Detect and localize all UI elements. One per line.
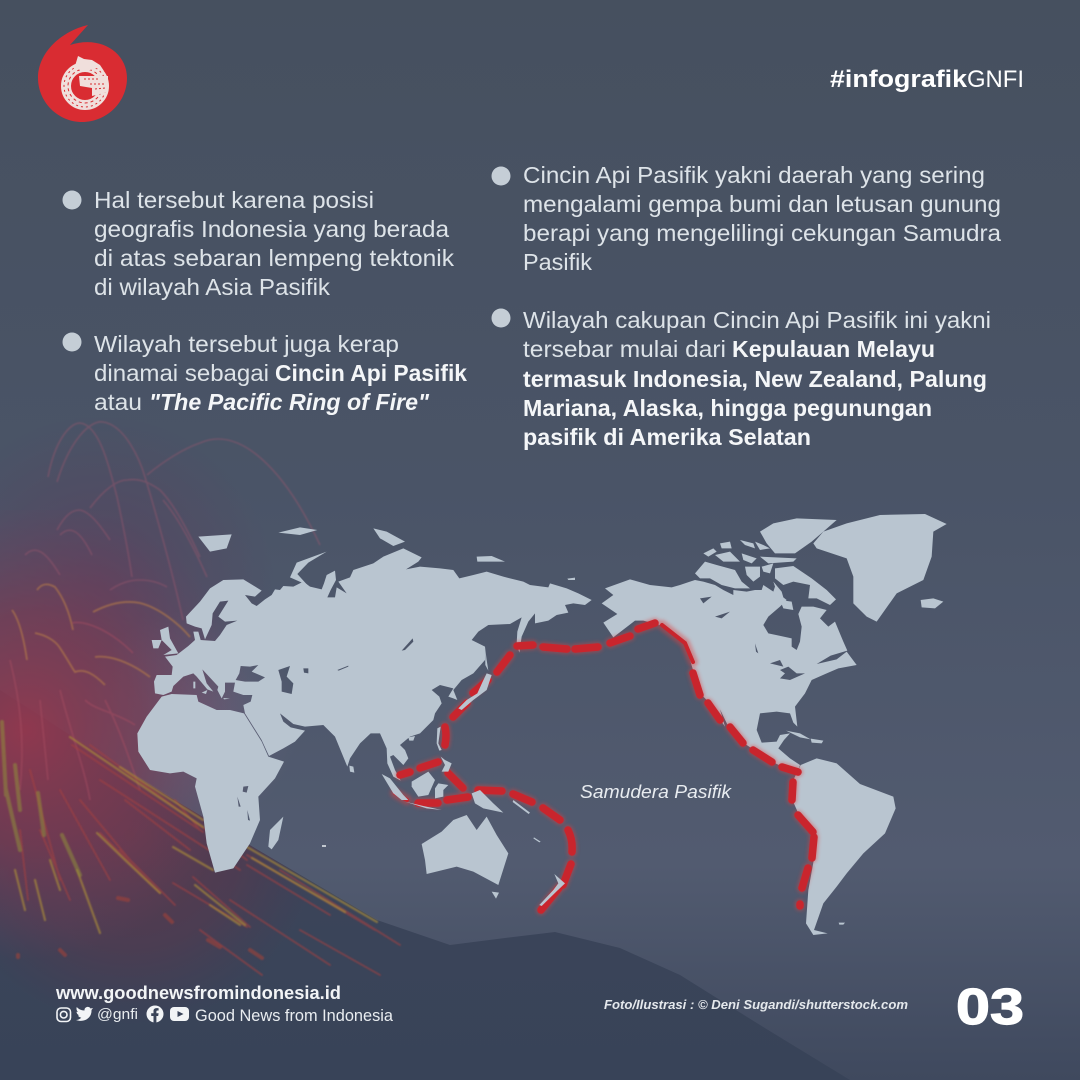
americas xyxy=(602,514,947,935)
tasmania xyxy=(492,892,499,899)
cuba xyxy=(786,731,811,739)
eurasia xyxy=(154,548,592,781)
new siberian islands xyxy=(477,556,505,562)
channel name: Good News from Indonesia xyxy=(195,1006,394,1025)
ring of fire: dashed line xyxy=(395,623,814,910)
ireland xyxy=(152,640,162,648)
hashtag: GNFI xyxy=(967,66,1024,93)
social row xyxy=(57,1006,394,1025)
falklands xyxy=(839,923,845,925)
bullet: definition: mengalami gempa bumi dan letusan gunung xyxy=(523,191,1001,217)
borneo xyxy=(412,772,435,797)
bullet: ring of fire name: dinamai sebagai xyxy=(94,360,269,386)
bullet: coverage xyxy=(492,307,991,450)
bullet: definition xyxy=(492,162,1001,275)
hainan xyxy=(408,736,415,741)
logo xyxy=(38,25,127,122)
wrangel island xyxy=(567,578,575,580)
japan xyxy=(458,673,492,710)
logo red drop xyxy=(38,25,127,122)
lava streaks xyxy=(2,722,400,975)
sakhalin xyxy=(485,647,488,671)
hashtag: #infografik xyxy=(830,66,968,93)
website: www.goodnewsfromindonesia.id xyxy=(55,983,341,1003)
novaya zemlya xyxy=(290,552,327,585)
sulawesi xyxy=(435,783,448,798)
other arctic islands xyxy=(703,540,797,610)
mountain silhouette xyxy=(0,690,850,1080)
volcano eruption photo xyxy=(0,400,850,1080)
bullet: ring of fire name: atau xyxy=(94,389,142,415)
new guinea xyxy=(472,790,503,813)
bullet: ring of fire name: Cincin Api Pasifik xyxy=(275,360,467,386)
icon: youtube xyxy=(170,1007,189,1021)
logo emblem xyxy=(64,56,108,107)
severnaya zemlya xyxy=(373,528,405,546)
orange embers xyxy=(12,584,190,685)
bullet: coverage: Wilayah cakupan Cincin Api Pasifik ini yakni xyxy=(523,307,991,333)
australia xyxy=(422,815,508,885)
mediterranean islands xyxy=(193,682,230,699)
hashtag xyxy=(830,66,1024,93)
bullet: ring of fire name: Wilayah tersebut juga kerap xyxy=(94,331,399,357)
icon: instagram xyxy=(57,1008,70,1022)
south america xyxy=(792,758,896,935)
bullet: geography: di wilayah Asia Pasifik xyxy=(94,274,331,300)
bullet: definition: berapi yang mengelilingi cekungan Samudra xyxy=(523,220,1001,246)
bullet: geography: geografis Indonesia yang berada xyxy=(94,216,449,242)
world map xyxy=(137,514,947,935)
page number: 03 xyxy=(956,978,1024,1035)
photo credit: Foto/Ilustrasi : © Deni Sugandi/shutterstock.com xyxy=(604,997,908,1012)
mindanao and visayas xyxy=(441,757,452,772)
bullet: coverage: termasuk Indonesia, New Zealand, Palung xyxy=(523,366,987,392)
sumatra xyxy=(382,774,408,800)
handle: @gnfi xyxy=(97,1006,138,1023)
ocean label: Samudera Pasifik xyxy=(580,782,732,802)
islands over the ring xyxy=(382,647,565,906)
greenland xyxy=(813,514,947,622)
icon: twitter xyxy=(76,1007,93,1021)
bullet: definition: Cincin Api Pasifik yakni daerah yang sering xyxy=(523,162,985,188)
ejecta arcs xyxy=(25,422,320,620)
bullet: ring of fire name: "The Pacific Ring of Fire" xyxy=(149,389,430,415)
ellesmere island xyxy=(760,518,837,553)
melanesia islands xyxy=(513,800,541,842)
britain xyxy=(160,627,178,655)
bullet: geography xyxy=(62,187,455,300)
bullet: coverage: pasifik di Amerika Selatan xyxy=(523,424,811,450)
bullet: geography: Hal tersebut karena posisi xyxy=(94,187,374,213)
sri lanka xyxy=(349,766,354,773)
north america xyxy=(602,579,857,773)
icon: facebook xyxy=(146,1006,164,1023)
bullet: definition: Pasifik xyxy=(523,249,593,275)
hispaniola xyxy=(811,739,823,743)
bullet: ring of fire name xyxy=(62,331,467,415)
ring of fire: glow xyxy=(395,623,814,910)
java xyxy=(405,802,442,810)
franz josef land xyxy=(278,527,317,535)
new zealand xyxy=(539,874,565,906)
baffin island xyxy=(775,566,836,605)
luzon xyxy=(437,727,442,751)
svalbard xyxy=(198,534,232,552)
bullet: coverage: Mariana, Alaska, hingga pegunungan xyxy=(523,395,932,421)
eurasia and africa xyxy=(137,527,592,899)
victoria island xyxy=(695,562,750,588)
iceland xyxy=(921,598,943,608)
bullet: geography: di atas sebaran lempeng tektonik xyxy=(94,245,455,271)
bullet: coverage: tersebar mulai dari xyxy=(523,336,726,362)
madagascar xyxy=(268,817,283,849)
africa xyxy=(137,694,284,873)
bullet: coverage: Kepulauan Melayu xyxy=(732,336,935,362)
